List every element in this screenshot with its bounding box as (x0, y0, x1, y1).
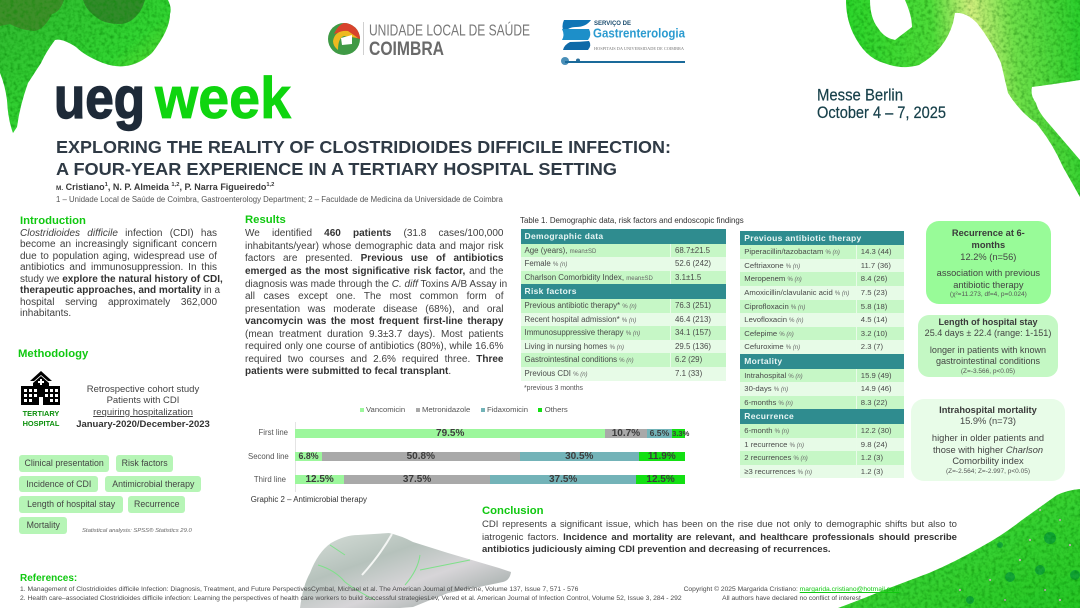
callout: recurrence at 6 months: months (972, 240, 1005, 250)
text: copyright and disclosure: Copyright © 2025 Margarida Cristiano: margarida.cristiano@hotmail.com (684, 586, 899, 593)
legend: antimicrobial chart: Vancomicin (366, 405, 405, 414)
text: introduction: inhabitants. (20, 308, 71, 319)
logo: Servico de Gastrenterologia (561, 20, 686, 65)
icon: hospital (21, 371, 60, 405)
bar: third line (254, 474, 685, 485)
logo: ueg week (54, 66, 292, 132)
bar: third line: 37.5% (403, 474, 431, 485)
tag: recurrence (128, 496, 185, 513)
text: results: required two courses and 2.6% required three. Three (245, 354, 504, 365)
text: results: required only one course of antibiotics (80%), while 16.6% (245, 341, 504, 352)
text: results (245, 228, 507, 377)
text: conclusion: CDI represents a significant issue, which has been on the rise due not only to demographic shifts but also to (482, 519, 957, 530)
table: previous antibiotics, mortality and recurrence: 2.3 (7) (861, 342, 883, 351)
text: introduction: study we explore the natural history of CDI, (20, 274, 223, 285)
artwork: bottom-right green organ (838, 489, 1080, 608)
bar: first line: 10.7% (612, 428, 640, 439)
tag: incidence of CDI (19, 476, 98, 492)
table: previous antibiotics, mortality and recurrence: 7.5 (23) (861, 288, 887, 297)
table: previous antibiotics, mortality and recurrence: 14.3 (44) (861, 247, 892, 256)
text: introduction: antibiotics and immunosuppression. In this (20, 262, 217, 273)
caption: graphic 2: Graphic 2 – Antimicrobial therapy (251, 495, 367, 504)
callout: length of hospital stay: (Z=-3.566, p<0.05) (961, 368, 1015, 375)
table: demographic data and risk factors: 52.6 (242) (675, 259, 711, 268)
table: previous antibiotics, mortality and recurrence: 1 recurrence % (n) (744, 440, 804, 449)
table: demographic data and risk factors: Previous antibiotic therapy* % (n) (524, 301, 637, 310)
table: previous antibiotics, mortality and recurrence: 2 recurrences % (n) (744, 453, 808, 462)
footnote: table 1: *previous 3 months (524, 385, 583, 392)
table: previous antibiotics, mortality and recurrence (740, 231, 904, 478)
table: previous antibiotics, mortality and recurrence: Meropenem % (n) (744, 274, 802, 283)
note: statistical analysis: Statistical analysis: SPSS® Statistics 29.0 (82, 528, 192, 534)
text: introduction: Clostridioides difficile infection (CDI) has (20, 228, 217, 239)
logo: ueg week: week (154, 66, 292, 131)
bar: second line: 50.8% (407, 451, 435, 462)
callout: recurrence at 6 months: antibiotic therapy (953, 280, 1023, 290)
table: previous antibiotics, mortality and recurrence: Cefuroxime % (n) (744, 342, 800, 351)
text: study design: Patients with CDI (107, 395, 179, 406)
title: EXPLORING THE REALITY OF CLOSTRIDIOIDES DIFFICILE INFECTION: (56, 137, 671, 157)
table: demographic data and risk factors: Living in nursing homes % (n) (524, 342, 624, 351)
table: previous antibiotics, mortality and recurrence: Ciprofloxacin % (n) (744, 302, 805, 311)
text: study design (76, 384, 210, 430)
text: introduction: hospital serving approximately 362,000 (20, 297, 217, 308)
table: demographic data and risk factors: Gastrointestinal conditions % (n) (524, 355, 634, 364)
affiliations: 1 – Unidade Local de Saúde de Coimbra, Gastroenterology Department; 2 – Faculdade de Medicina da Universidade de Coimbra (56, 195, 503, 204)
logo: Servico de Gastrenterologia: HOSPITAIS DA UNIVERSIDADE DE COIMBRA (594, 47, 684, 51)
text: conclusion: antibiotics judiciously aiming CDI prevention and decreasing of recurrences. (482, 544, 831, 555)
text: copyright and disclosure (684, 586, 900, 602)
table: previous antibiotics, mortality and recurrence: 30-days % (n) (744, 384, 788, 393)
table: demographic data and risk factors: Age (years), mean±SD (524, 246, 596, 255)
event location and dates: Messe Berlin (817, 86, 903, 104)
bar: third line: 12.5% (305, 474, 334, 485)
tag: clinical presentation: Clinical presentation (25, 458, 104, 468)
text: introduction: due to population aging, widespread use of (20, 251, 217, 262)
callout: length of hospital stay: gastrointestinal conditions (936, 356, 1040, 366)
logo: Unidade Local de Saude Coimbra (328, 20, 530, 60)
tag: length of hospital stay (19, 496, 123, 513)
table: previous antibiotics, mortality and recurrence: 3.2 (10) (861, 329, 887, 338)
callout: recurrence at 6 months: (χ²=11.273, df=4, p=0.024) (950, 291, 1027, 298)
bar: third line: 37.5% (549, 474, 577, 485)
tag: length of hospital stay: Length of hospital stay (27, 499, 115, 509)
table: previous antibiotics, mortality and recurrence: 8.3 (22) (861, 398, 887, 407)
tag: antimicrobial therapy: Antimicrobial therapy (112, 479, 194, 489)
bar: second line: Second line (248, 452, 289, 461)
table: demographic data and risk factors: Previous CDI % (n) (524, 369, 588, 378)
table: demographic data and risk factors: Female % (n) (524, 259, 567, 268)
text: references (20, 586, 682, 602)
table: demographic data and risk factors: Demographic data (524, 231, 603, 241)
logo: ueg week: ueg (54, 66, 145, 131)
text: results: emerged as the most significative risk factor, and the (245, 266, 503, 277)
table: previous antibiotics, mortality and recurrence: Intrahospital % (n) (744, 371, 803, 380)
table: demographic data and risk factors: Risk factors (524, 286, 577, 296)
legend: antimicrobial chart (360, 405, 568, 414)
text: references: 2. Health care–associated Clostridioides difficile infection: Learning the perspectives of health care workers to build successful strategiesLev, Vered et al. American Journal of Infection Control, Volume 52, Issue 3, 284 - 292 (20, 595, 682, 602)
table: demographic data and risk factors (521, 229, 726, 381)
table: previous antibiotics, mortality and recurrence: Levofloxacin % (n) (744, 315, 804, 324)
text: results: We identified 460 patients (31.8 cases/100,000 (245, 228, 504, 239)
tag: mortality (19, 517, 67, 534)
text: results: factors are presented. Previous use of antibiotics (245, 253, 503, 264)
table: previous antibiotics, mortality and recurrence: 9.8 (24) (861, 440, 887, 449)
bar: second line: 11.9% (648, 451, 676, 462)
callout: recurrence at 6 months (926, 221, 1051, 304)
artwork: liver (300, 533, 511, 608)
table: previous antibiotics, mortality and recurrence: 1.2 (3) (861, 467, 883, 476)
authors: M. Cristiano1, N. P. Almeida 1,2, P. Narra Figueiredo1,2 (56, 182, 274, 192)
table: previous antibiotics, mortality and recurrence: Recurrence (744, 411, 794, 421)
heading: Conclusion: Conclusion (482, 505, 544, 517)
table: demographic data and risk factors: Recent hospital admission* % (n) (524, 315, 636, 324)
bar: first line (259, 428, 690, 439)
table: previous antibiotics, mortality and recurrence: ≥3 recurrences % (n) (744, 467, 812, 476)
table: demographic data and risk factors: 68.7±21.5 (675, 246, 710, 255)
tag: risk factors: Risk factors (122, 458, 168, 468)
table: previous antibiotics, mortality and recurrence: 11.7 (36) (861, 261, 891, 270)
heading: References: References: (20, 573, 77, 584)
text: results: diagnosis was made through the C. diff Toxins A/B Assay in (245, 279, 507, 290)
table: demographic data and risk factors: 76.3 (251) (675, 301, 711, 310)
table: demographic data and risk factors: 46.4 (213) (675, 315, 711, 324)
text: results: patients were submitted to fecal transplant. (245, 366, 451, 377)
artwork: top-left green organ (0, 0, 171, 133)
bar: first line: First line (259, 428, 288, 437)
tag: antimicrobial therapy (105, 476, 201, 492)
text: study design: January-2020/December-2023 (76, 419, 210, 430)
title: A FOUR-YEAR EXPERIENCE IN A TERTIARY HOSPITAL SETTING (56, 159, 617, 179)
callout: recurrence at 6 months: Recurrence at 6- (952, 228, 1025, 238)
legend: antimicrobial chart: Fidaxomicin (487, 405, 528, 414)
heading: Introduction: Introduction (20, 214, 86, 226)
label: tertiary hospital: TERTIARY (23, 409, 59, 418)
bar: second line (248, 451, 685, 462)
callout: intrahospital mortality: Intrahospital mortality (939, 405, 1037, 415)
text: study design: requiring hospitalization (93, 407, 193, 418)
text: study design: Retrospective cohort study (87, 384, 199, 394)
bar: second line: 6.8% (299, 451, 319, 461)
title (56, 137, 671, 179)
legend: antimicrobial chart: Metronidazole (422, 405, 470, 414)
table: previous antibiotics, mortality and recurrence: 12.2 (30) (861, 426, 892, 435)
table: previous antibiotics, mortality and recurrence: Ceftriaxone % (n) (744, 261, 800, 270)
logo: Unidade Local de Saude Coimbra: COIMBRA (369, 39, 444, 60)
callout: intrahospital mortality: those with higher Charlson (933, 445, 1043, 455)
callout: intrahospital mortality: (Z=-2.564; Z=-2.997, p<0.05) (946, 468, 1030, 475)
callout: length of hospital stay (918, 315, 1058, 377)
callout: length of hospital stay: Length of hospital stay (938, 317, 1038, 327)
table: demographic data and risk factors: Charlson Comorbidity Index, mean±SD (524, 273, 653, 282)
table: demographic data and risk factors: 6.2 (29) (675, 355, 702, 364)
heading: Methodology: Methodology (18, 348, 88, 360)
bar: first line: 3.3% (672, 429, 689, 438)
table: previous antibiotics, mortality and recurrence: Cefepime % (n) (744, 329, 794, 338)
text: references: 1. Management of Clostridioides difficile Infection: Diagnosis, Treatment, and Future PerspectivesCymbal, Michael et al. The American Journal of Medicine, Volume 137, Issue 7, 571 - 576 (20, 586, 578, 593)
label: tertiary hospital: HOSPITAL (23, 418, 59, 428)
table: demographic data and risk factors: Immunosuppressive therapy % (n) (524, 328, 640, 337)
table: previous antibiotics, mortality and recurrence: 1.2 (3) (861, 453, 883, 462)
text: conclusion (482, 519, 957, 555)
table: demographic data and risk factors: 3.1±1.5 (675, 273, 701, 282)
callout: recurrence at 6 months: 12.2% (n=56) association with previous (937, 252, 1040, 278)
bar: first line: 6.5% (650, 428, 669, 438)
callout: intrahospital mortality: 15.9% (n=73) higher in older patients and (932, 416, 1044, 443)
label: tertiary hospital (22, 409, 60, 428)
text: conclusion: iatrogenic factors. Incidence and mortality are relevant, and healthcare professionals should prescribe (482, 532, 957, 543)
callout: length of hospital stay: 25.4 days ± 22.4 (range: 1-151) longer in patients with known (925, 328, 1051, 355)
table: previous antibiotics, mortality and recurrence: 6-month % (n) (744, 426, 789, 435)
table: demographic data and risk factors: 7.1 (33) (675, 369, 702, 378)
legend: antimicrobial chart: Others (545, 405, 568, 414)
text: results: presentation was moderate disease (68%), and oral (245, 304, 504, 315)
tag: mortality: Mortality (27, 520, 60, 530)
tag: recurrence: Recurrence (134, 499, 180, 509)
table: previous antibiotics, mortality and recurrence: 14.9 (46) (861, 384, 892, 393)
table: previous antibiotics, mortality and recurrence: Piperacillin/tazobactam % (n) (744, 247, 840, 256)
table: previous antibiotics, mortality and recurrence: 15.9 (49) (861, 371, 892, 380)
table: demographic data and risk factors: 34.1 (157) (675, 328, 711, 337)
table: previous antibiotics, mortality and recurrence: Amoxicillin/clavulanic acid % (n) (744, 288, 849, 297)
event location and dates (817, 86, 946, 122)
table: previous antibiotics, mortality and recurrence: Mortality (744, 356, 782, 366)
bar: second line: 30.5% (565, 451, 593, 462)
table: previous antibiotics, mortality and recurrence: 8.4 (26) (861, 274, 887, 283)
bar: first line: 79.5% (436, 428, 464, 439)
table: previous antibiotics, mortality and recurrence: 6-months % (n) (744, 398, 793, 407)
tag: clinical presentation (19, 455, 109, 472)
tag: risk factors (116, 455, 173, 472)
logo: Servico de Gastrenterologia: SERVIÇO DE (594, 20, 632, 27)
text: introduction: therapeutic approaches, and mortality in a (20, 285, 220, 296)
bar: third line: Third line (254, 475, 286, 484)
text: introduction (20, 228, 223, 319)
heading: Results: Results (245, 214, 286, 226)
artwork: top-right green organ (846, 0, 1080, 197)
text: results: vancomycin was the most frequent first-line therapy (245, 316, 504, 327)
tag: incidence of CDI: Incidence of CDI (26, 479, 91, 489)
chart: antimicrobial therapy stacked bars (248, 422, 690, 492)
text: results: inhabitants/year) whose demographic data and major risk (245, 241, 504, 252)
text: results: (mean treatment duration 9.3±3.7 days). Most patients (245, 329, 504, 340)
table: previous antibiotics, mortality and recurrence: Previous antibiotic therapy (744, 233, 862, 243)
table: previous antibiotics, mortality and recurrence: 5.8 (18) (861, 302, 887, 311)
text: results: all cases except one. The most common form of (245, 291, 504, 302)
text: copyright and disclosure: All authors have declared no conflict of interest (722, 595, 861, 602)
text: introduction: become an increasingly significant concern (20, 239, 217, 250)
bar: third line: 12.5% (646, 474, 675, 485)
caption: table 1: Table 1. Demographic data, risk factors and endoscopic findings (520, 216, 744, 224)
table: previous antibiotics, mortality and recurrence: 4.5 (14) (861, 315, 887, 324)
table: demographic data and risk factors: 29.5 (136) (675, 342, 711, 351)
callout: intrahospital mortality (911, 399, 1065, 481)
callout: intrahospital mortality: Comorbility index (952, 456, 1024, 466)
